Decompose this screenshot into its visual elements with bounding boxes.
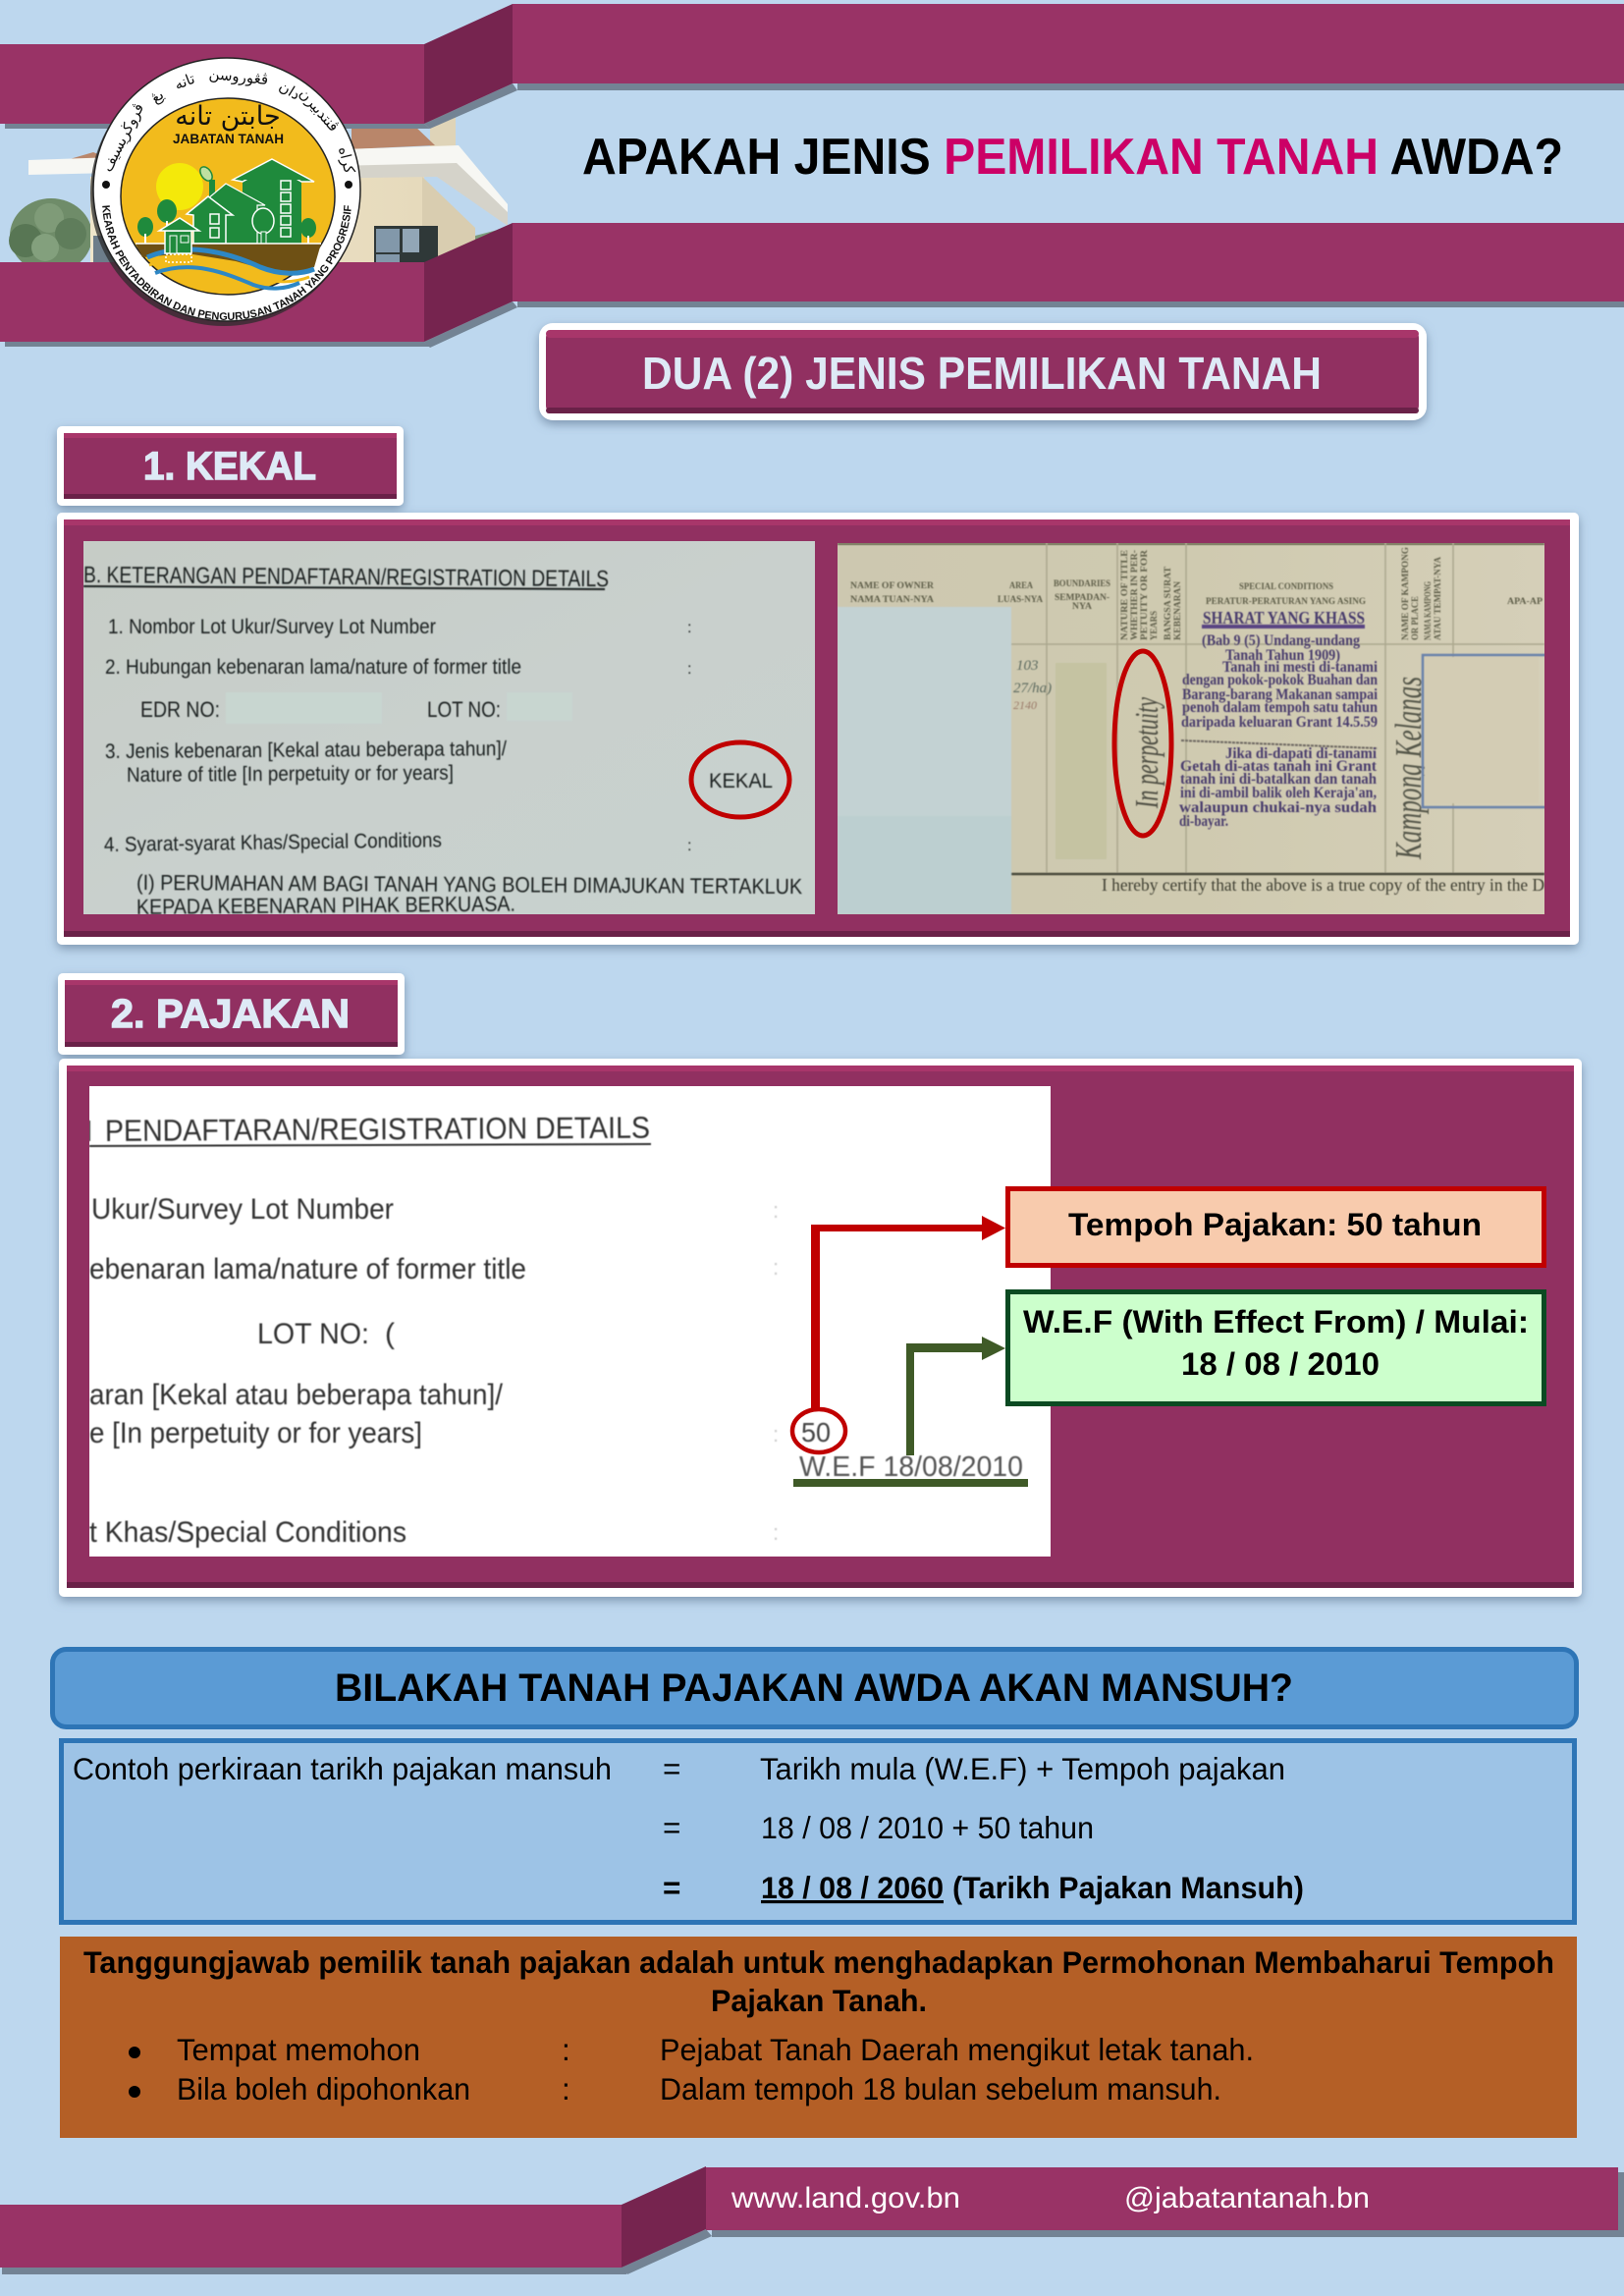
panel: calculation example: =	[663, 1751, 680, 1786]
logo: Jawi ring motto: كراه	[335, 145, 358, 176]
document photo: registration details: 1. Nombor Lot Ukur/Survey Lot Number	[108, 616, 436, 638]
panel: owner responsibility: :	[562, 2032, 570, 2067]
document photo: in perpetuity grant: Tanah ini mesti di-tanami	[1222, 659, 1378, 676]
document photo: lease registration: :	[773, 1422, 779, 1447]
logo: Jawi ring motto: ڤڠوروسن	[208, 65, 269, 88]
document photo: in perpetuity grant: AREA	[1009, 580, 1033, 590]
document photo: in perpetuity grant: BOUNDARIES	[1054, 578, 1110, 588]
document photo: in perpetuity grant: penoh dalam tempoh satu tahun	[1182, 699, 1378, 716]
document photo: in perpetuity grant: di-bayar.	[1179, 813, 1228, 830]
document photo: in perpetuity grant: NAMA TUAN-NYA	[850, 594, 935, 604]
panel: calculation example: 18 / 08 / 2060	[761, 1870, 944, 1905]
logo: sun	[156, 163, 203, 210]
label: 2. pajakan: 2. PAJAKAN	[111, 991, 350, 1036]
document photo: lease registration: aran [Kekal atau beberapa tahun]/	[89, 1379, 504, 1411]
document photo: in perpetuity grant: APA-AP	[1507, 596, 1543, 606]
logo: Jawi ring motto: تانه	[172, 70, 197, 93]
logo: leaf	[197, 165, 215, 183]
document photo: lease registration	[71, 1086, 1051, 1557]
document photo: registration details: 2. Hubungan kebenaran lama/nature of former title	[105, 656, 521, 679]
document photo: registration details: 3. Jenis kebenaran [Kekal atau beberapa tahun]/	[105, 738, 507, 763]
document photo: lease registration: :	[773, 1198, 779, 1223]
panel: pajakan document	[59, 1059, 1582, 1597]
document photo: in perpetuity grant: PETUITY OR FOR	[1139, 549, 1149, 640]
document photo: in perpetuity grant: NAME OF OWNER	[850, 580, 935, 590]
panel: calculation example: =	[663, 1810, 680, 1845]
logo: Jawi ring motto: ڤروڬريسيف	[98, 100, 147, 175]
label: 1. kekal: 1. KEKAL	[143, 445, 316, 488]
panel: owner responsibility: Tempat memohon	[177, 2032, 420, 2067]
logo: stilt house	[159, 218, 199, 262]
document photo: lease registration: N	[71, 1114, 92, 1148]
document photo: registration details	[83, 541, 815, 919]
panel: calculation example: Tarikh mula (W.E.F) + Tempoh pajakan	[760, 1751, 1285, 1786]
document photo: lease registration: W.E.F 18/08/2010	[799, 1451, 1023, 1483]
footer ribbon	[0, 2166, 1624, 2274]
callout: w.e.f date	[1007, 1292, 1543, 1404]
panel: owner responsibility: Pajakan Tanah.	[711, 1983, 927, 2018]
document photo: registration details: (I) PERUMAHAN AM BAGI TANAH YANG BOLEH DIMAJUKAN TERTAKLUK	[136, 870, 802, 899]
label: 2. pajakan	[58, 973, 405, 1055]
logo: tall house	[233, 159, 314, 244]
heading: dua jenis pemilikan tanah: DUA (2) JENIS PEMILIKAN TANAH	[642, 348, 1322, 399]
heading: bilakah tanah pajakan	[53, 1650, 1577, 1726]
document photo: in perpetuity grant: Kampong Kelanas	[1388, 677, 1430, 860]
document photo: in perpetuity grant: Tanah Tahun 1909)	[1225, 647, 1340, 664]
document photo: lease registration: t Khas/Special Conditions	[89, 1516, 406, 1549]
panel: owner responsibility	[60, 1937, 1577, 2138]
document photo: in perpetuity grant: NAME OF KAMPONG	[1400, 547, 1410, 640]
panel: calculation example	[61, 1740, 1575, 1923]
document photo: in perpetuity grant: walaupun chukai-nya sudah	[1179, 799, 1377, 816]
logo: Jawi ring motto: يڠ	[147, 85, 167, 107]
document photo: in perpetuity grant: WHETHER IN PER-	[1129, 550, 1139, 640]
panel: owner responsibility: Pejabat Tanah Daerah mengikut letak tanah.	[660, 2032, 1254, 2067]
document photo: in perpetuity grant: NYA	[1072, 601, 1093, 611]
document photo: in perpetuity grant: I hereby certify that the above is a true copy of the entry in the D	[1102, 875, 1544, 895]
document photo: in perpetuity grant: daripada keluaran Grant 14.5.59	[1181, 714, 1378, 731]
document photo: in perpetuity grant: ini di-ambil balik oleh Keraja'an,	[1180, 785, 1377, 801]
photo: house behind the header ribbon	[9, 111, 508, 273]
document photo: registration details: B. KETERANGAN PENDAFTARAN/REGISTRATION DETAILS	[83, 562, 609, 591]
document photo: lease registration: (	[385, 1318, 395, 1350]
document photo: registration details: LOT NO:	[427, 697, 501, 722]
document photo: lease registration: :	[773, 1520, 779, 1545]
panel: kekal documents	[57, 513, 1579, 945]
logo: Jabatan Tanah seal	[90, 57, 361, 326]
document photo: in perpetuity grant: BANGSA SURAT	[1163, 567, 1172, 640]
document photo: registration details: 4. Syarat-syarat Khas/Special Conditions	[104, 829, 442, 856]
document photo: in perpetuity grant: dengan pokok-pokok Buahan dan	[1182, 672, 1378, 688]
panel: owner responsibility: :	[562, 2071, 570, 2106]
logo: Jawi ring motto: دان	[276, 78, 303, 103]
logo: ground	[135, 244, 321, 275]
document photo: registration details: Nature of title [In perpetuity or for years]	[127, 762, 454, 787]
document photo: registration details: KEPADA KEBENARAN PIHAK BERKUASA.	[136, 892, 515, 919]
document photo: registration details: :	[687, 661, 691, 678]
document photo: in perpetuity grant: Jika di-dapati di-tanami	[1225, 745, 1378, 762]
document photo: in perpetuity grant: OR PLACE	[1410, 596, 1420, 640]
document photo: lease registration: ebenaran lama/nature of former title	[89, 1253, 526, 1285]
highlight: 50 circle	[792, 1409, 845, 1452]
panel: owner responsibility: Tanggungjawab pemilik tanah pajakan adalah untuk menghadapkan Permohonan Membaharui Tempoh	[83, 1944, 1554, 1980]
heading: bilakah tanah pajakan: BILAKAH TANAH PAJAKAN AWDA AKAN MANSUH?	[335, 1667, 1293, 1710]
label: 1. kekal	[57, 426, 404, 506]
logo: middle house	[187, 180, 265, 244]
document photo: in perpetuity grant: Barang-barang Makanan sampai	[1182, 686, 1378, 703]
panel: calculation example: =	[663, 1870, 680, 1905]
document photo: in perpetuity grant: (Bab 9 (5) Undang-undang	[1202, 632, 1360, 649]
logo: trees	[137, 199, 316, 244]
arrow: w.e.f date	[906, 1337, 1005, 1455]
highlight: kekal circle	[691, 742, 789, 817]
header ribbon	[0, 4, 1624, 348]
social handle: @jabatantanah.bn	[1124, 2182, 1370, 2214]
document photo: registration details: EDR NO:	[140, 697, 220, 722]
document photo: in perpetuity grant: 27/ha)	[1013, 681, 1052, 696]
document photo: registration details: KEKAL	[709, 770, 773, 793]
panel: calculation example: Contoh perkiraan tarikh pajakan mansuh	[73, 1751, 612, 1786]
callout: tempoh pajakan	[1007, 1188, 1543, 1265]
document photo: lease registration: Ukur/Survey Lot Number	[91, 1193, 394, 1226]
document photo: registration details: :	[687, 620, 691, 636]
highlight: date underline	[793, 1479, 1028, 1487]
logo: Jawi ring motto: ڤنتدبيرن	[296, 84, 343, 136]
document photo: in perpetuity grant: ATAU TEMPAT-NYA	[1433, 557, 1442, 640]
arrow: tempoh pajakan	[811, 1216, 1005, 1409]
logo: name: JABATAN TANAH	[173, 132, 284, 146]
document photo: lease registration: 50	[801, 1417, 831, 1448]
document photo: in perpetuity grant: NATURE OF TITLE	[1119, 550, 1129, 640]
heading: dua jenis pemilikan tanah	[539, 323, 1427, 420]
document photo: in perpetuity grant: NAMA KAMPONG	[1423, 581, 1433, 640]
document photo: in perpetuity grant: SPECIAL CONDITIONS	[1239, 581, 1333, 591]
logo: Jawi name: جابتن تانه	[175, 101, 281, 132]
website: www.land.gov.bn	[731, 2182, 960, 2214]
panel: calculation example: (Tarikh Pajakan Mansuh)	[952, 1870, 1304, 1905]
logo: ring motto: KEARAH PENTADBIRAN DAN PENGURUSAN TANAH YANG PROGRESIF	[102, 205, 352, 320]
callout: w.e.f date: 18 / 08 / 2010	[1181, 1346, 1380, 1382]
document photo: in perpetuity grant: KEBENARAN	[1172, 580, 1182, 640]
document photo: registration details: :	[687, 838, 691, 854]
logo: river waves	[147, 249, 314, 289]
panel: owner responsibility: Bila boleh dipohonkan	[177, 2071, 470, 2106]
document photo: lease registration: :	[773, 1255, 779, 1280]
document photo: in perpetuity grant: PERATUR-PERATURAN YANG ASING	[1206, 596, 1366, 606]
document photo: in perpetuity grant: Getah di-atas tanah ini Grant	[1180, 758, 1378, 775]
document photo: in perpetuity grant: tanah ini di-batalkan dan tanah	[1180, 771, 1377, 788]
panel: calculation example: 18 / 08 / 2010 + 50 tahun	[761, 1810, 1094, 1845]
document photo: in perpetuity grant: YEARS	[1149, 611, 1159, 640]
document photo: lease registration: LOT NO:	[257, 1318, 369, 1350]
callout: w.e.f date: W.E.F (With Effect From) / Mulai:	[1023, 1304, 1529, 1339]
document photo: in perpetuity grant: 103	[1016, 658, 1039, 674]
document photo: lease registration: e [In perpetuity or for years]	[89, 1417, 422, 1449]
title: APAKAH JENIS PEMILIKAN TANAH AWDA?	[582, 128, 1563, 185]
document photo: in perpetuity grant: LUAS-NYA	[998, 594, 1043, 604]
document photo: in perpetuity grant: In perpetuity	[1129, 696, 1165, 809]
document photo: in perpetuity grant: 2140	[1013, 698, 1037, 712]
highlight: in perpetuity ellipse	[1114, 651, 1171, 836]
panel: owner responsibility: Dalam tempoh 18 bulan sebelum mansuh.	[660, 2071, 1221, 2106]
document photo: lease registration: PENDAFTARAN/REGISTRATION DETAILS	[105, 1111, 650, 1148]
callout: tempoh pajakan: Tempoh Pajakan: 50 tahun	[1068, 1207, 1482, 1242]
document photo: in perpetuity grant: SHARAT YANG KHASS	[1203, 608, 1365, 628]
document photo: in perpetuity grant	[838, 543, 1560, 914]
document photo: in perpetuity grant: SEMPADAN-	[1055, 592, 1110, 602]
logo: Jawi ring motto	[98, 65, 358, 176]
